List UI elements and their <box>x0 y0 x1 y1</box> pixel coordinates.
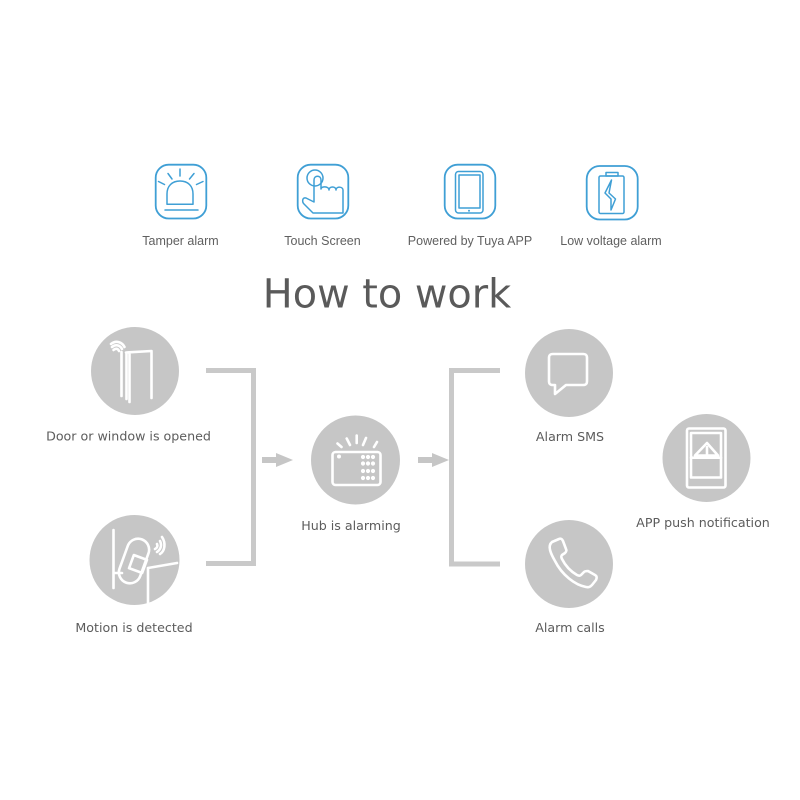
label: touch screen: Touch Screen <box>284 234 361 248</box>
label: door or window is opened: Door or window is opened <box>46 428 211 444</box>
icon: sms bubble <box>525 329 613 417</box>
arrow: to hub <box>262 453 293 467</box>
icon: motion sensor <box>90 515 180 605</box>
label: motion is detected: Motion is detected <box>75 620 193 635</box>
label: hub is alarming: Hub is alarming <box>301 518 401 533</box>
icon: app push notification <box>662 414 750 502</box>
icon: phone <box>525 520 613 608</box>
label: app push notification: APP push notification <box>636 515 770 530</box>
left bracket <box>206 370 254 564</box>
title: How to work <box>263 272 511 318</box>
label: alarm sms: Alarm SMS <box>536 429 604 444</box>
label: tamper alarm: Tamper alarm <box>142 234 219 248</box>
icon: door or window sensor <box>91 327 179 415</box>
label: low voltage alarm: Low voltage alarm <box>560 234 662 248</box>
right bracket <box>452 370 500 564</box>
icon: tablet <box>445 165 495 218</box>
icon: hub <box>311 416 400 504</box>
label: powered by tuya app: Powered by Tuya APP <box>408 234 532 248</box>
arrow: from hub <box>418 453 449 467</box>
label: alarm calls: Alarm calls <box>535 620 605 635</box>
icon: tamper alarm <box>156 165 206 218</box>
icon: low voltage battery <box>587 166 638 220</box>
icon: touch screen <box>298 165 348 218</box>
